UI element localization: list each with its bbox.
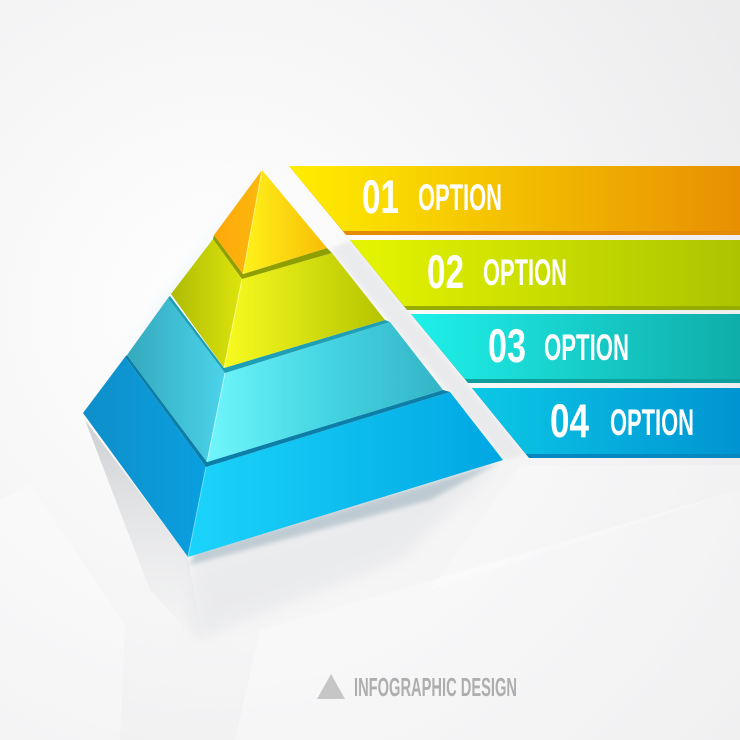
banner 2 — [350, 240, 740, 310]
footer caption: INFOGRAPHIC DESIGN — [354, 672, 517, 702]
pyramid — [83, 170, 503, 557]
banner 3 label: OPTION — [544, 327, 629, 368]
tier 4 base — [83, 355, 503, 557]
footer logo — [317, 672, 517, 702]
pyramid shadow — [85, 185, 505, 650]
banner 1 label: OPTION — [418, 177, 502, 218]
banner 3 — [411, 314, 740, 383]
tier 2 — [171, 235, 385, 368]
banner 4 — [472, 388, 740, 458]
gap shadow between pyramid and banners — [330, 240, 525, 460]
icon: grey triangle — [317, 674, 345, 699]
tier 1 top — [214, 170, 327, 274]
tier 3 — [127, 296, 443, 462]
banner 1 number: 01 — [362, 170, 399, 223]
banner 4 number: 04 — [550, 394, 589, 447]
banner 1 — [289, 166, 740, 235]
banner 2 label: OPTION — [483, 252, 567, 293]
banner 2 number: 02 — [427, 245, 464, 298]
banner 3 number: 03 — [488, 319, 526, 372]
